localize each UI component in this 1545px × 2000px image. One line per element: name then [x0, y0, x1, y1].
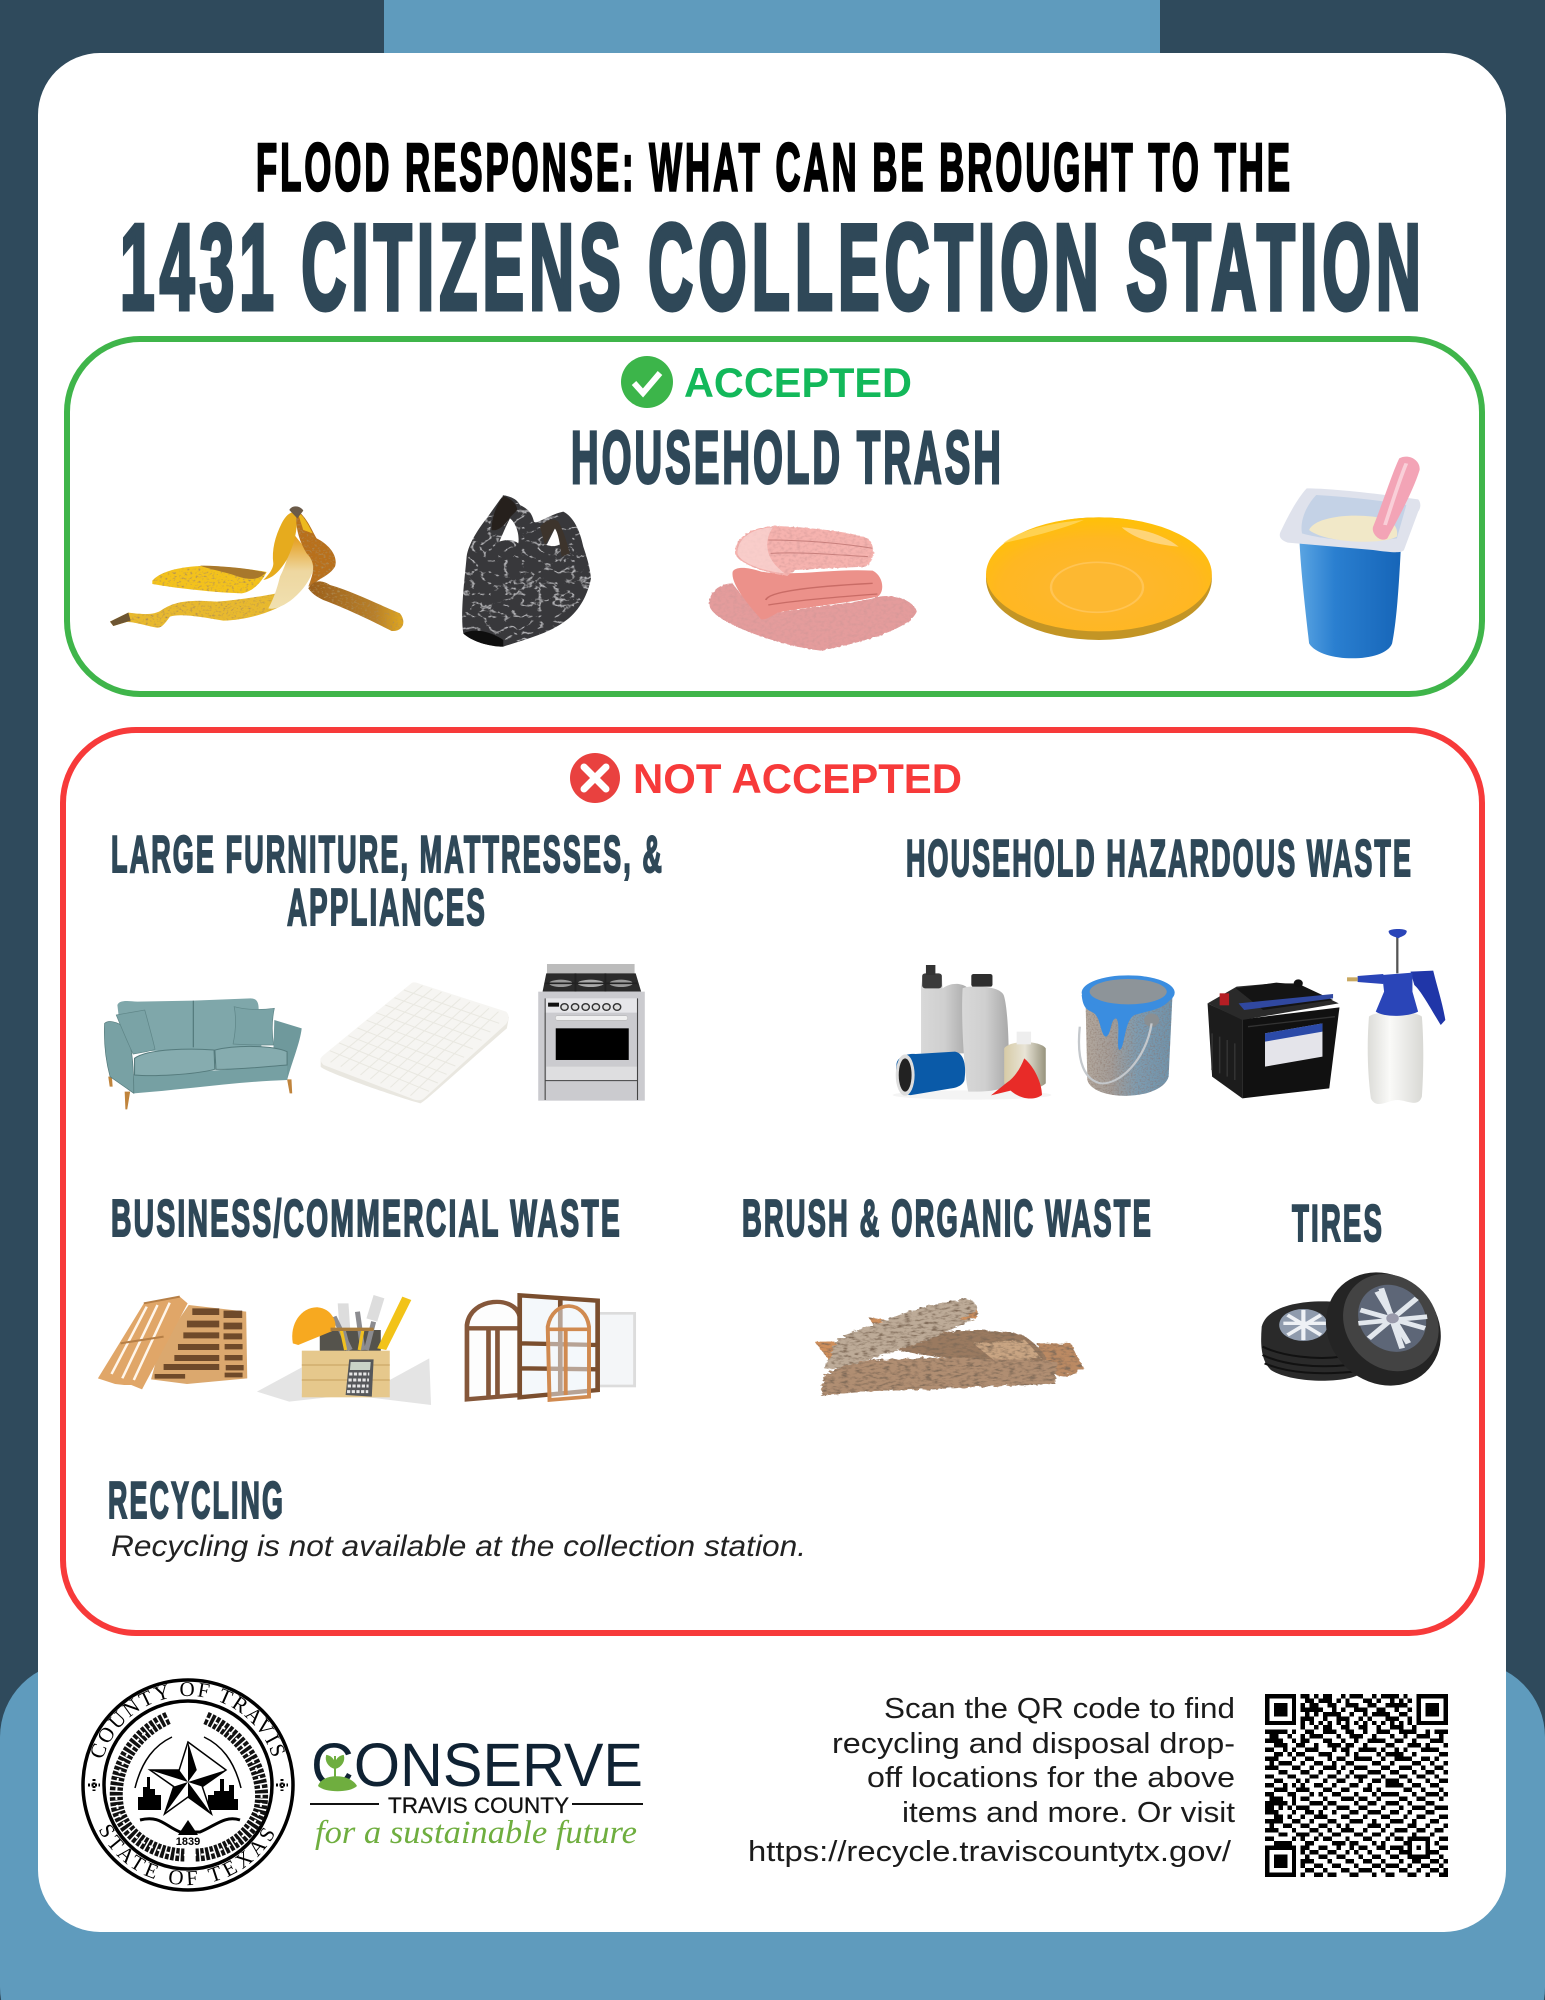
- icon: county seal: STATE OF TEXAS: [99, 1824, 274, 1886]
- icon: yogurt cup: [1280, 457, 1420, 658]
- icon: windows: [467, 1295, 635, 1400]
- panel: not accepted: [63, 730, 1482, 1633]
- icon: mattress: [321, 982, 509, 1103]
- icon: wood pallets: [98, 1297, 247, 1389]
- footer text: off locations for the above: [867, 1762, 1235, 1794]
- footer text: https://recycle.traviscountytx.gov/: [748, 1836, 1232, 1868]
- icon: toolbox with hard hat: [257, 1295, 431, 1405]
- recycling note: Recycling is not available at the collection station.: [111, 1530, 806, 1563]
- icon: county seal: COUNTY OF TRAVIS: [91, 1682, 285, 1758]
- icon: cross mark: [570, 753, 620, 803]
- icon: paint can: [1079, 975, 1175, 1096]
- icon: sofa: [104, 998, 302, 1109]
- icon: county seal: 1839: [176, 1836, 200, 1848]
- footer text: recycling and disposal drop-: [832, 1728, 1235, 1760]
- heading: brush and organic waste: BRUSH & ORGANIC WASTE: [742, 1189, 1153, 1247]
- icon: banana peel: [110, 506, 403, 631]
- heading: large furniture: [111, 825, 664, 936]
- icon: logs: [815, 1298, 1083, 1396]
- logo: conserve travis county: TRAVIS COUNTY: [388, 1793, 569, 1818]
- heading: large furniture: APPLIANCES: [287, 878, 487, 936]
- icon: check mark: [621, 356, 673, 408]
- icon: yellow plate: [986, 517, 1212, 640]
- heading: recycling: RECYCLING: [108, 1471, 285, 1529]
- not accepted label: NOT ACCEPTED: [633, 755, 962, 802]
- logo: conserve travis county: CONSERVE: [311, 1731, 643, 1799]
- panel: accepted: [67, 339, 1482, 694]
- icon: pink towels: [709, 526, 917, 651]
- heading: tires: TIRES: [1292, 1194, 1384, 1252]
- icon: tires: [1261, 1262, 1456, 1396]
- icon: stove: [538, 964, 645, 1101]
- footer text: [748, 1693, 1235, 1868]
- icon: pump sprayer: [1347, 929, 1445, 1104]
- footer text: Scan the QR code to find: [884, 1693, 1235, 1725]
- icon: county seal: [81, 1678, 295, 1892]
- bottom accent band: [0, 1662, 1545, 2000]
- logo: conserve travis county: for a sustainable future: [315, 1815, 637, 1851]
- top accent band: [384, 0, 1160, 60]
- QR code: [1265, 1694, 1448, 1877]
- logo: conserve travis county: [310, 1731, 643, 1851]
- footer text: items and more. Or visit: [902, 1797, 1235, 1829]
- heading: business waste: BUSINESS/COMMERCIAL WASTE: [111, 1189, 622, 1247]
- icon: car battery: [1208, 979, 1339, 1098]
- accepted label: ACCEPTED: [684, 359, 912, 406]
- heading: household trash: HOUSEHOLD TRASH: [571, 416, 1004, 499]
- icon: black trash bag: [462, 495, 591, 647]
- icon: oil jugs and filter: [893, 965, 1051, 1100]
- heading: large furniture: LARGE FURNITURE, MATTRESSES, &: [111, 825, 664, 883]
